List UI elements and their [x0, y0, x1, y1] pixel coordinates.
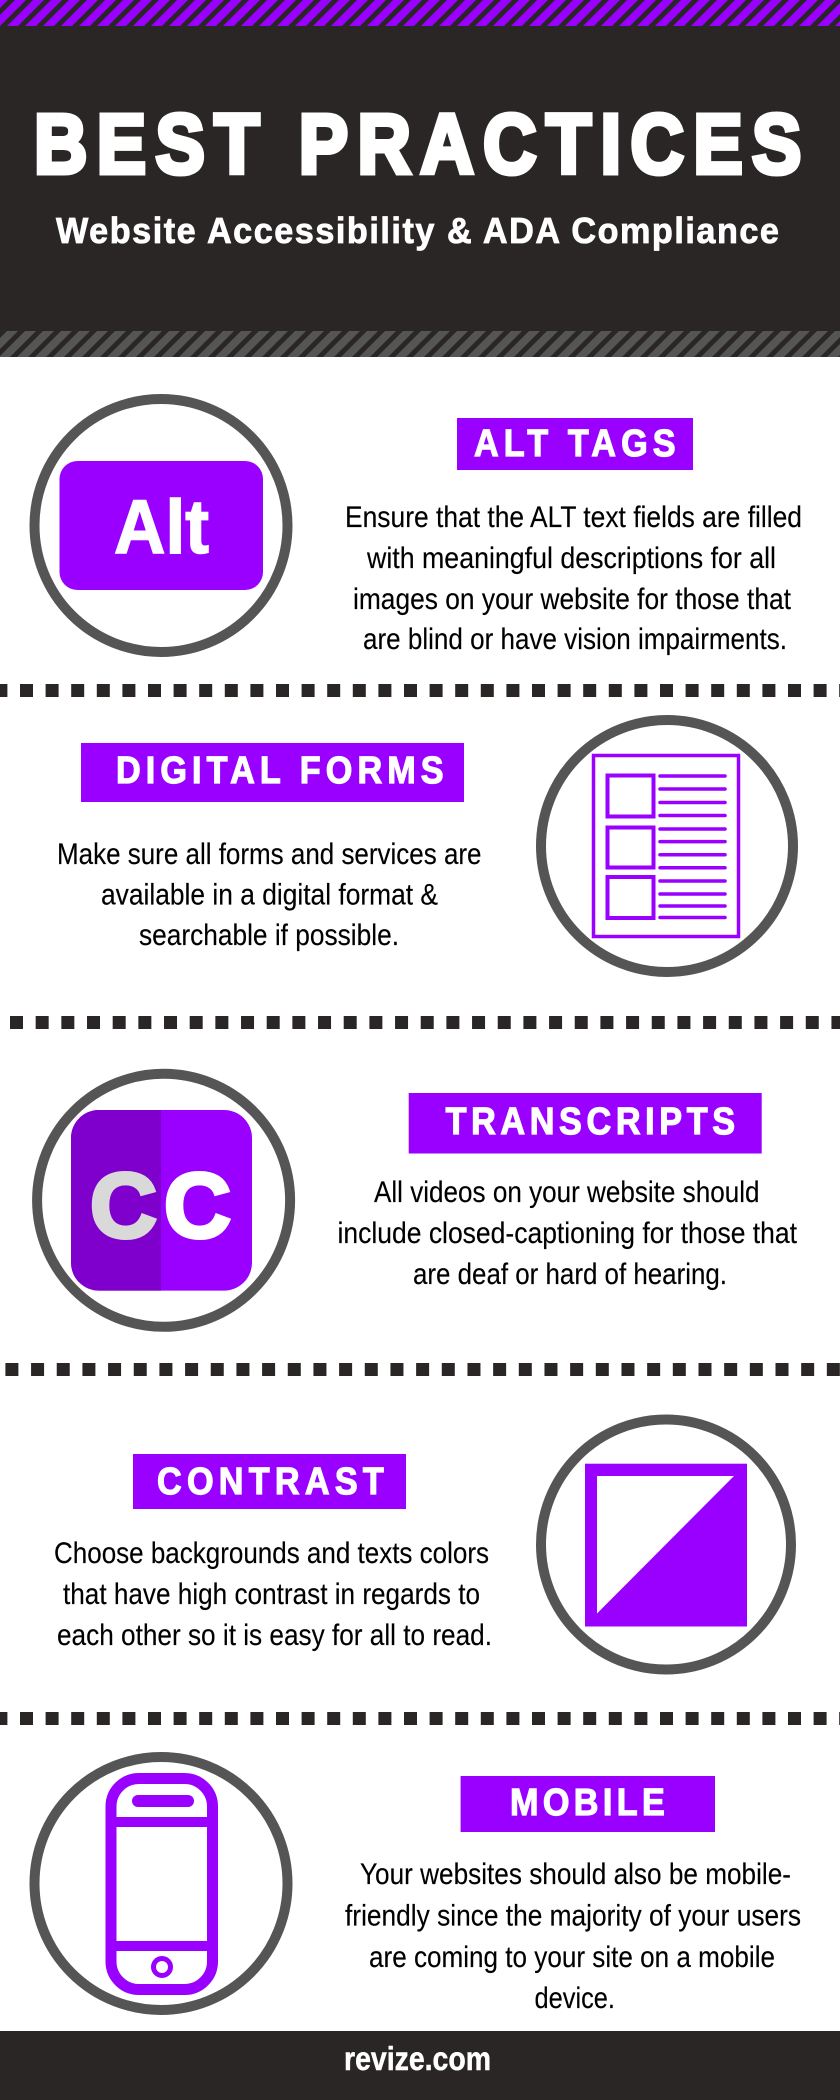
text block: alt tags description: images on your website for those that — [353, 583, 792, 616]
text block: alt tags description — [345, 501, 802, 656]
text block: contrast description: Choose backgrounds and texts colors — [54, 1537, 489, 1570]
text block: contrast description — [54, 1537, 492, 1652]
icon: closed captions: C — [90, 1155, 157, 1257]
icon: alt badge: Alt — [114, 485, 209, 570]
text block: transcripts description: All videos on your website should — [374, 1176, 760, 1209]
text block: alt tags description: with meaningful descriptions for all — [366, 542, 776, 575]
panel: alt tags — [34, 399, 802, 656]
text block: mobile description: device. — [534, 1982, 615, 2015]
heading: mobile — [461, 1776, 715, 1832]
title: BEST PRACTICES — [34, 97, 801, 191]
text block: digital forms description — [57, 838, 482, 952]
text block: mobile description: are coming to your site on a mobile — [369, 1941, 775, 1974]
heading: mobile: MOBILE — [510, 1780, 665, 1823]
text block: mobile description — [345, 1858, 801, 2015]
icon: alt badge — [34, 399, 288, 652]
text block: digital forms description: searchable if possible. — [139, 919, 399, 952]
heading: digital forms: DIGITAL FORMS — [116, 748, 444, 791]
heading: alt tags: ALT TAGS — [474, 421, 676, 464]
footer — [0, 2031, 840, 2100]
heading: digital forms — [81, 743, 464, 802]
icon: form document — [541, 720, 793, 972]
icon: smartphone — [34, 1757, 288, 2010]
panel: transcripts — [37, 1074, 798, 1327]
text block: transcripts description — [338, 1176, 798, 1291]
text block: contrast description: that have high contrast in regards to — [63, 1578, 480, 1611]
heading: transcripts — [409, 1093, 762, 1154]
panel: header banner — [0, 0, 840, 357]
text block: transcripts description: are deaf or hard of hearing. — [413, 1258, 727, 1291]
text block: contrast description: each other so it is easy for all to read. — [57, 1619, 492, 1652]
text block: mobile description: Your websites should also be mobile- — [360, 1858, 791, 1891]
subtitle: Website Accessibility & ADA Compliance — [56, 211, 779, 251]
text block: alt tags description: are blind or have vision impairments. — [363, 623, 787, 656]
icon: contrast square — [541, 1420, 791, 1670]
icon: closed captions — [37, 1074, 290, 1327]
heading: contrast: CONTRAST — [157, 1459, 384, 1502]
icon: closed captions: C — [164, 1155, 231, 1257]
panel: contrast — [54, 1420, 791, 1670]
heading: contrast — [133, 1454, 406, 1509]
text block: digital forms description: available in a digital format & — [101, 878, 438, 912]
footer: revize.com — [344, 2040, 491, 2077]
panel: mobile — [34, 1757, 801, 2015]
heading: transcripts: TRANSCRIPTS — [446, 1099, 735, 1142]
panel: digital forms — [57, 720, 793, 972]
text block: digital forms description: Make sure all forms and services are — [57, 838, 482, 871]
